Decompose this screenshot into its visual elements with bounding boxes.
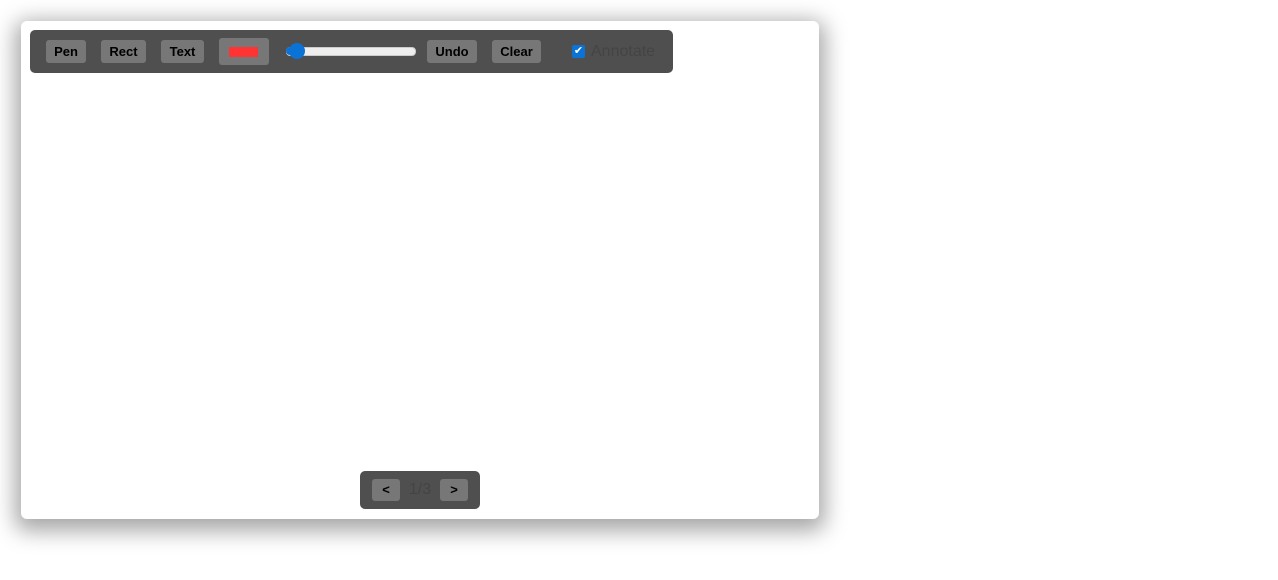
panel: image card — [21, 21, 819, 519]
button: next: > — [450, 482, 458, 497]
button: Text — [161, 40, 204, 63]
button: prev: < — [382, 482, 390, 497]
checkbox: Annotate: ✔ — [574, 45, 583, 57]
toolbar — [30, 30, 673, 73]
button: Clear: Clear — [500, 44, 533, 59]
button: Rect — [101, 40, 146, 63]
button: Undo: Undo — [435, 44, 469, 59]
button: Text: Text — [170, 44, 195, 59]
button: next — [440, 479, 468, 501]
checkbox: Annotate: Annotate — [591, 43, 655, 60]
page indicator: 1/3 — [409, 481, 431, 498]
color swatch button — [219, 38, 269, 65]
button: Rect: Rect — [109, 44, 138, 59]
button: prev — [372, 479, 400, 501]
button: Clear — [492, 40, 541, 63]
button: Pen: Pen — [54, 44, 78, 59]
button: Undo — [427, 40, 477, 63]
page navigation — [360, 471, 480, 509]
button: Pen — [46, 40, 86, 63]
slider — [286, 43, 416, 59]
